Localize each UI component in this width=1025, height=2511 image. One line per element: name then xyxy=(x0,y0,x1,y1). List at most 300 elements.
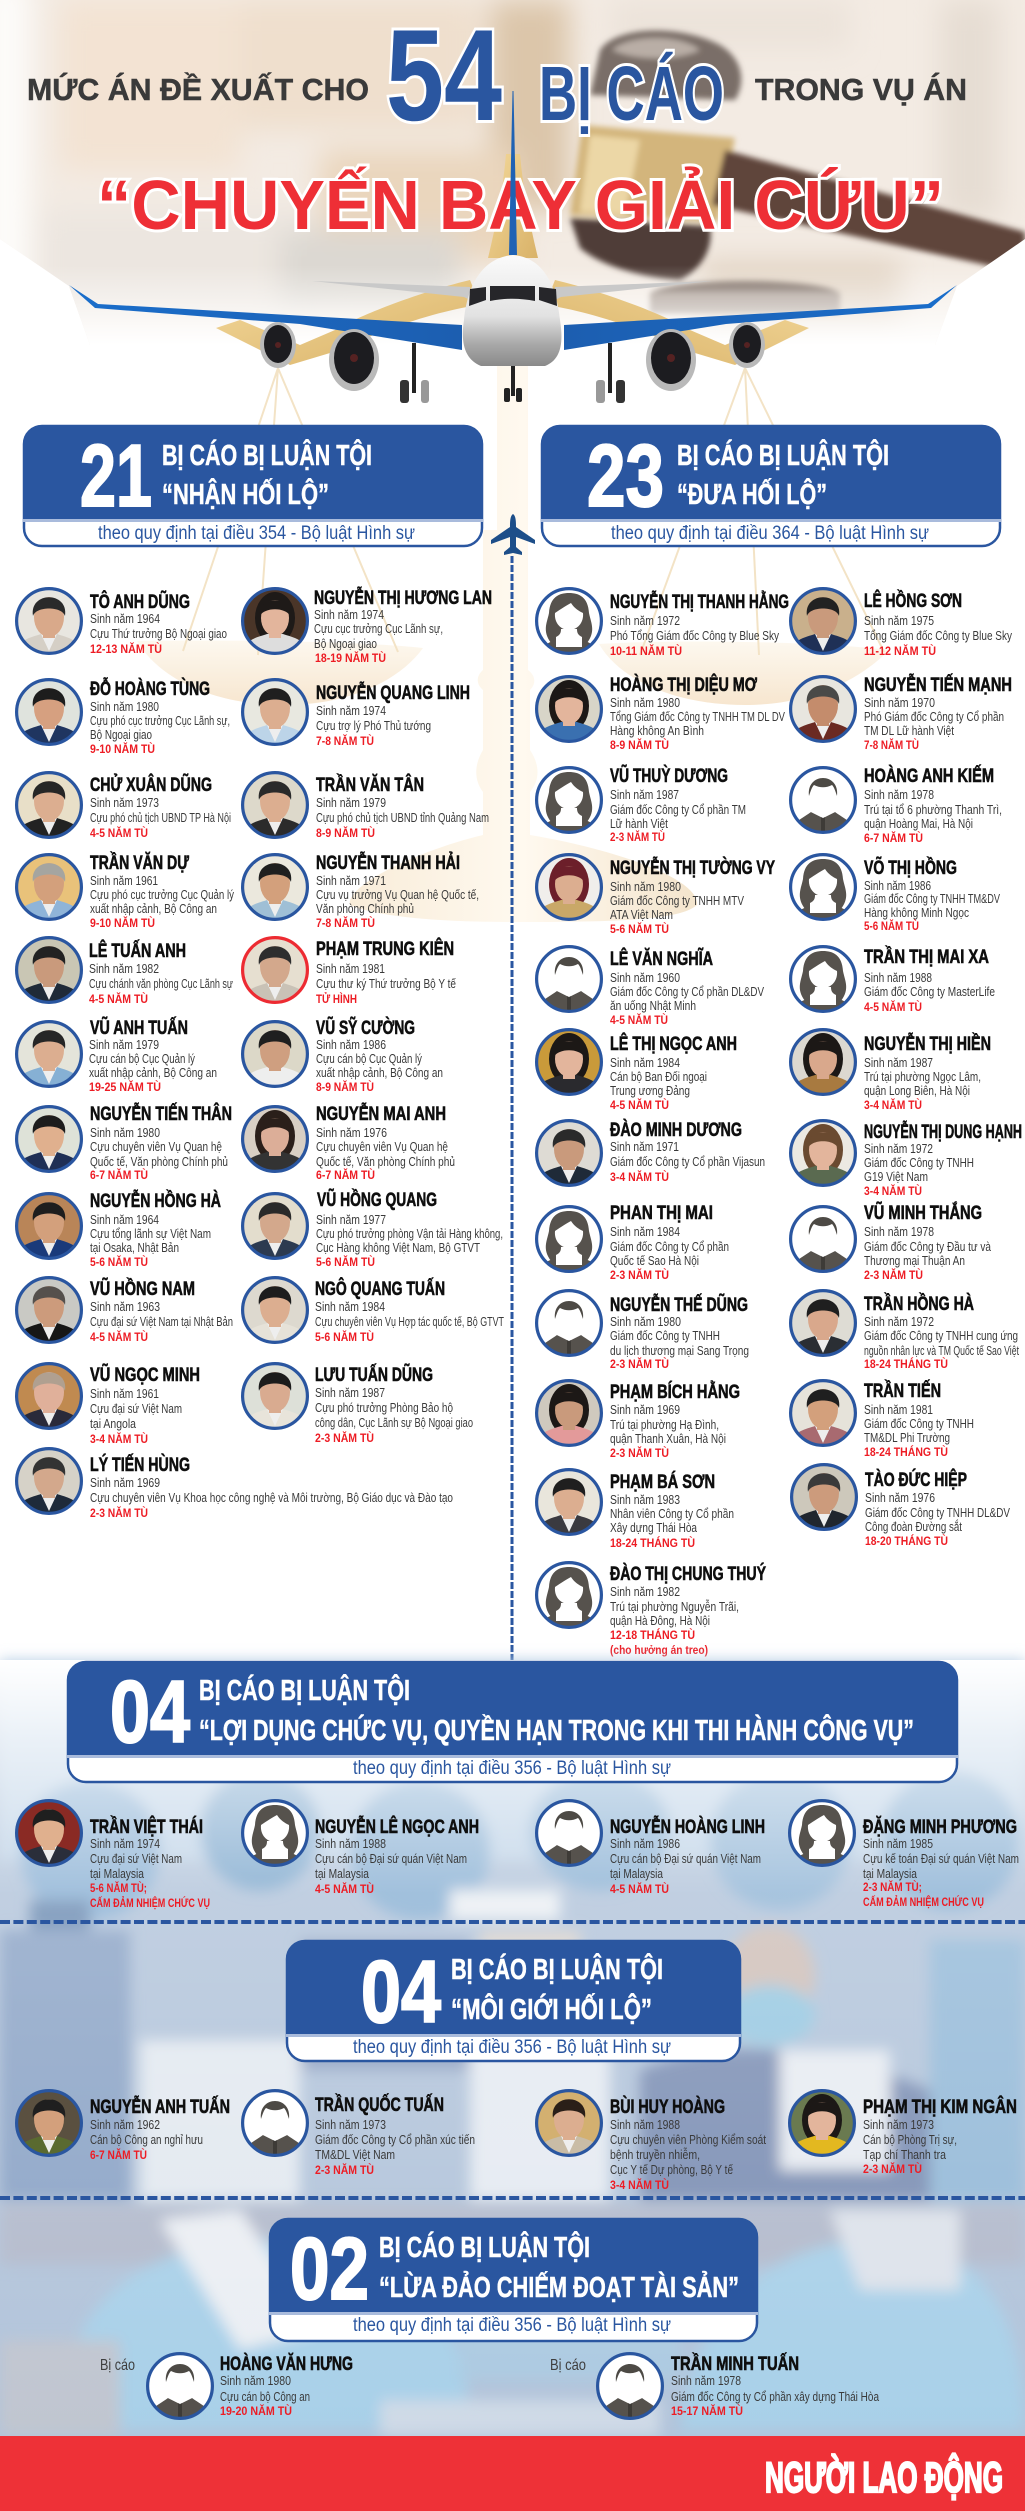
bio: xuất nhập cảnh, Bộ Công an xyxy=(90,902,217,916)
bio: Giám đốc Công ty Đầu tư và xyxy=(864,1240,991,1254)
sentence: 12-13 NĂM TÙ xyxy=(90,641,162,656)
bio xyxy=(864,614,1013,643)
person: Tào Đức Hiệp xyxy=(790,1464,1011,1548)
person: Nguyễn Mai Anh xyxy=(241,1103,455,1182)
sentence: 4-5 NĂM TÙ xyxy=(864,999,922,1014)
scale finial xyxy=(488,154,538,258)
portrait xyxy=(535,589,603,657)
bio: Sinh năm 1974 xyxy=(314,608,384,622)
portrait xyxy=(789,1120,857,1187)
person: Lê Tuấn Anh xyxy=(15,937,233,1006)
bio: Sinh năm 1979 xyxy=(316,796,386,810)
bio: Sinh năm 1980 xyxy=(610,880,681,894)
name: TRẦN VĂN TÂN xyxy=(316,774,424,796)
scale column xyxy=(350,366,697,922)
sentence: 11-12 NĂM TÙ xyxy=(864,643,936,658)
bio: Sinh năm 1979 xyxy=(89,1038,159,1052)
bio xyxy=(90,796,231,825)
bio xyxy=(316,1038,443,1080)
portrait xyxy=(789,947,857,1015)
airplane illustration xyxy=(69,91,957,403)
sentence: 5-6 NĂM TÙ xyxy=(864,918,919,933)
bio: Cục Hàng không Việt Nam, Bộ GTVT xyxy=(316,1241,480,1255)
bio: Sinh năm 1987 xyxy=(315,1386,385,1400)
portrait xyxy=(788,2090,856,2157)
name: NGUYỄN TIẾN THÂN xyxy=(90,1103,232,1125)
bio: Cựu cán bộ Cục Quản lý xyxy=(316,1052,423,1066)
bio: Xây dựng Thái Hòa xyxy=(610,1521,697,1535)
person: Nguyễn Thị Thanh Hằng xyxy=(535,589,789,658)
name: TRẦN VIỆT THÁI xyxy=(90,1816,203,1838)
left pan xyxy=(137,641,423,705)
right wing xyxy=(564,285,957,350)
panel: 02 defendants fraud xyxy=(269,2219,758,2341)
bottom background photo: medical staff in blue gowns xyxy=(0,1660,1025,2436)
person: Nguyễn Thế Dũng xyxy=(529,1291,749,1371)
bio xyxy=(610,614,780,643)
portrait xyxy=(535,1563,603,1631)
engines xyxy=(260,322,765,391)
sentence: 7-8 NĂM TÙ xyxy=(316,915,375,930)
bio: Sinh năm 1987 xyxy=(864,1056,933,1070)
portrait xyxy=(241,679,309,746)
sentence: 3-4 NĂM TÙ xyxy=(610,1169,669,1184)
name: TRẦN TIẾN xyxy=(864,1380,941,1402)
portrait xyxy=(783,1207,863,1275)
person: Lưu Tuấn Dũng xyxy=(241,1363,473,1445)
portrait xyxy=(789,1380,857,1447)
portrait xyxy=(529,947,609,1015)
person: Vũ Minh Thắng xyxy=(783,1202,991,1282)
person: Trần Văn Dự xyxy=(15,852,235,930)
bio: Cựu đại sứ Việt Nam xyxy=(90,1852,182,1866)
bio: Giám đốc Công ty Cổ phần Vijasun xyxy=(610,1155,765,1169)
sentence: 4-5 NĂM TÙ xyxy=(89,991,148,1006)
person: Trần Quốc Tuấn xyxy=(235,2091,475,2177)
person: Đỗ Hoàng Tùng xyxy=(15,678,230,756)
legal basis: theo quy định tại điều 364 - Bộ luật Hình sự xyxy=(611,523,929,544)
bio xyxy=(90,1213,211,1255)
bio: Cựu cán bộ Đại sứ quán Việt Nam xyxy=(315,1852,467,1866)
portrait xyxy=(535,1380,603,1447)
bio: Sinh năm 1978 xyxy=(671,2374,741,2388)
sentence: 3-4 NĂM TÙ xyxy=(864,1183,922,1198)
person: Nguyễn Quang Linh xyxy=(241,679,470,748)
name: NGUYỄN MAI ANH xyxy=(316,1103,446,1125)
bio: Giám đốc Công ty MasterLife xyxy=(864,985,995,999)
name: VŨ HỒNG NAM xyxy=(90,1278,195,1300)
bio xyxy=(89,962,233,991)
person: Nguyễn Thanh Hải xyxy=(241,852,479,930)
number 54: 54 xyxy=(386,2,502,148)
bio: Sinh năm 1986 xyxy=(610,1837,680,1851)
sentence: (cho hưởng án treo) xyxy=(610,1643,708,1657)
person: Đào Minh Dương xyxy=(535,1119,765,1187)
sentence: 2-3 NĂM TÙ xyxy=(610,1445,669,1460)
stabilizers xyxy=(312,281,470,300)
person: Trần Minh Tuấn xyxy=(550,2353,879,2422)
sentence: 6-7 NĂM TÙ xyxy=(316,1167,375,1182)
title line 2: “CHUYẾN BAY GIẢI CỨU” xyxy=(97,166,944,244)
bio: tại Malaysia xyxy=(610,1867,663,1881)
person: Lý Tiến Hùng xyxy=(15,1448,453,1520)
tail fin xyxy=(509,91,517,255)
bio: Cựu chuyên viên Vụ Hợp tác quốc tế, Bộ GTVT xyxy=(315,1315,504,1329)
sentence: 3-4 NĂM TÙ xyxy=(610,2177,669,2192)
sentence: CẤM ĐẢM NHIỆM CHỨC VỤ xyxy=(90,1895,210,1910)
sentence: 2-3 NĂM TÙ xyxy=(864,1267,923,1282)
bio: Công đoàn Đường sắt xyxy=(865,1519,962,1534)
bio: Sinh năm 1971 xyxy=(316,874,386,888)
name: TRẦN QUỐC TUẤN xyxy=(315,2094,444,2116)
person: Hoàng Anh Kiếm xyxy=(783,765,1002,845)
person: Phạm Thị Kim Ngân xyxy=(788,2090,1017,2176)
bio: Sinh năm 1978 xyxy=(864,1225,934,1239)
portrait xyxy=(241,588,309,655)
bio xyxy=(865,1491,1011,1534)
bio: Cựu chuyên viên Vụ Quan hệ xyxy=(90,1140,222,1154)
icon: small plane xyxy=(491,514,535,555)
portrait xyxy=(140,2354,220,2422)
portrait xyxy=(15,937,83,1004)
portrait xyxy=(15,1363,83,1430)
sentence: 2-3 NĂM TÙ xyxy=(610,829,665,844)
person: Nguyễn Thị Hiền xyxy=(789,1029,991,1112)
bio: Sinh năm 1971 xyxy=(610,1140,679,1154)
name: NGUYỄN QUANG LINH xyxy=(316,682,470,704)
footer band xyxy=(0,2436,1025,2511)
bio: Sinh năm 1973 xyxy=(863,2118,934,2132)
sentence: 5-6 NĂM TÙ xyxy=(90,1254,148,1269)
bio xyxy=(610,696,785,738)
name: ĐỖ HOÀNG TÙNG xyxy=(90,678,210,700)
name: PHẠM BÍCH HẰNG xyxy=(610,1381,740,1403)
bio: Sinh năm 1981 xyxy=(316,962,385,976)
sentence: 4-5 NĂM TÙ xyxy=(90,1329,148,1344)
legal basis: theo quy định tại điều 356 - Bộ luật Hình sự xyxy=(353,1758,671,1779)
sentence: 19-20 NĂM TÙ xyxy=(220,2403,292,2418)
bio: Cựu cục trưởng Cục Lãnh sự, xyxy=(314,622,443,636)
portrait xyxy=(15,1448,83,1515)
scale ropes xyxy=(183,368,884,655)
name: VŨ SỸ CƯỜNG xyxy=(316,1017,415,1039)
sentence: 2-3 NĂM TÙ xyxy=(90,1505,148,1520)
bio: Sinh năm 1986 xyxy=(316,1038,386,1052)
bio xyxy=(315,1837,467,1881)
bio: Cựu cán bộ Đại sứ quán Việt Nam xyxy=(610,1852,761,1866)
sentence: 15-17 NĂM TÙ xyxy=(671,2403,743,2418)
title line 1 left: MỨC ÁN ĐỀ XUẤT CHO xyxy=(27,71,369,107)
bio: Sinh năm 1984 xyxy=(610,1056,680,1070)
bio: G19 Việt Nam xyxy=(864,1170,928,1184)
legal basis: theo quy định tại điều 354 - Bộ luật Hình sự xyxy=(98,523,415,544)
bio xyxy=(610,880,745,922)
centre dashed divider xyxy=(510,556,514,1660)
bio xyxy=(316,1126,455,1169)
bio: Cựu phó cục trưởng Cục Lãnh sự, xyxy=(90,714,230,728)
bio: Sinh năm 1976 xyxy=(865,1491,935,1505)
bio: Giám đốc Công ty TNHH MTV xyxy=(610,894,745,908)
portrait xyxy=(235,2091,315,2159)
bio: Cựu cán bộ Cục Quản lý xyxy=(89,1052,196,1066)
person: Nguyễn Hồng Hà xyxy=(15,1190,221,1269)
bio: Cựu phó chủ tịch UBND TP Hà Nội xyxy=(90,811,231,825)
bio xyxy=(90,1837,182,1881)
person: Nguyễn Anh Tuấn xyxy=(15,2090,230,2162)
person: Phạm Trung Kiên xyxy=(241,937,456,1006)
bio: Giám đốc Công ty Cổ phần xúc tiến xyxy=(315,2133,475,2147)
name: VŨ NGỌC MINH xyxy=(90,1364,200,1386)
name: NGUYỄN HỒNG HÀ xyxy=(90,1190,221,1212)
person: Đặng Minh Phương xyxy=(788,1801,1019,1909)
person: Nguyễn Thị Hương Lan xyxy=(241,587,492,665)
bio: Sinh năm 1961 xyxy=(90,1387,159,1401)
bio: Cựu chánh văn phòng Cục Lãnh sự xyxy=(89,977,233,991)
name: BÙI HUY HOÀNG xyxy=(610,2096,725,2118)
person: Trần Việt Thái xyxy=(15,1800,210,1910)
name: LÊ THỊ NGỌC ANH xyxy=(610,1033,737,1055)
person: Phạm Bích Hằng xyxy=(535,1380,740,1460)
bio: Sinh năm 1973 xyxy=(315,2118,386,2132)
name: NGUYỄN THỊ TƯỜNG VY xyxy=(610,857,775,879)
sentence: 8-9 NĂM TÙ xyxy=(610,737,669,752)
bio xyxy=(90,1300,233,1329)
bio: Trú tại phường Nguyễn Trãi, xyxy=(610,1599,739,1614)
bio xyxy=(316,874,479,916)
bio: Cán bộ Phòng Trị sự, xyxy=(863,2133,957,2147)
bio: Sinh năm 1974 xyxy=(316,704,386,718)
portrait xyxy=(15,1021,83,1088)
bio: Bộ Ngoại giao xyxy=(90,728,152,742)
person: Chử Xuân Dũng xyxy=(15,772,231,840)
bio: quận Hà Đông, Hà Nội xyxy=(610,1614,710,1628)
name: ĐÀO MINH DƯƠNG xyxy=(610,1119,742,1141)
name: VŨ HỒNG QUANG xyxy=(317,1189,437,1211)
bio: xuất nhập cảnh, Bộ Công an xyxy=(316,1066,443,1080)
person: Vũ Ngọc Minh xyxy=(15,1363,200,1446)
sentence: 8-9 NĂM TÙ xyxy=(316,825,375,840)
bio: TM&DL Việt Nam xyxy=(315,2148,395,2162)
person: Võ Thị Hồng xyxy=(789,855,1000,933)
bio: Sinh năm 1960 xyxy=(610,971,680,985)
bio xyxy=(864,879,1000,920)
bio: bệnh truyền nhiễm, xyxy=(610,2147,700,2162)
scale beam gold xyxy=(216,280,480,365)
portrait xyxy=(241,1363,309,1430)
bio: Sinh năm 1969 xyxy=(90,1476,160,1490)
person: Vũ Thuỳ Dương xyxy=(535,765,746,844)
charge: “ĐƯA HỐI LỘ” xyxy=(677,477,827,511)
portrait xyxy=(529,1801,609,1869)
bio: Cựu chuyên viên Vụ Khoa học công nghệ và Môi trường, Bộ Giáo dục và Đào tạo xyxy=(90,1491,453,1505)
bio: Cựu trợ lý Phó Thủ tướng xyxy=(316,719,431,733)
title xyxy=(27,2,967,244)
bio xyxy=(610,1056,707,1098)
bio: Sinh năm 1984 xyxy=(315,1300,385,1314)
name: NGUYỄN THỊ HƯƠNG LAN xyxy=(314,587,492,609)
bio xyxy=(610,1140,765,1169)
number: 02 xyxy=(290,2219,369,2318)
name: PHAN THỊ MAI xyxy=(610,1203,713,1224)
bio: Thương mại Thuận An xyxy=(864,1254,965,1268)
bio xyxy=(864,1315,1019,1358)
bio xyxy=(90,1126,228,1169)
name: VÕ THỊ HỒNG xyxy=(864,857,957,879)
bio: ATA Việt Nam xyxy=(610,908,673,922)
sentence: 3-4 NĂM TÙ xyxy=(864,1097,922,1112)
sentence: 6-7 NĂM TÙ xyxy=(864,830,923,845)
portrait xyxy=(15,1277,83,1344)
header photo: gavel xyxy=(0,0,1025,350)
name: PHẠM TRUNG KIÊN xyxy=(316,938,454,960)
name: TÔ ANH DŨNG xyxy=(90,591,190,613)
portrait xyxy=(241,1801,309,1869)
bio: Tạp chí Thanh tra xyxy=(863,2148,946,2162)
heading: BỊ CÁO BỊ LUẬN TỘI xyxy=(199,1673,410,1707)
name: LÊ TUẤN ANH xyxy=(89,940,186,962)
name: PHẠM BÁ SƠN xyxy=(610,1471,715,1493)
portrait xyxy=(789,1029,857,1096)
bio xyxy=(863,2118,957,2162)
number: 21 xyxy=(80,426,152,525)
bio: Tổng Giám đốc Công ty TNHH TM DL DV xyxy=(610,710,785,724)
portrait xyxy=(535,1469,603,1536)
number: 23 xyxy=(587,426,664,525)
bio: Phó Tổng Giám đốc Công ty Blue Sky xyxy=(610,629,780,643)
sentence: 10-11 NĂM TÙ xyxy=(610,643,682,658)
name: NGUYỄN THANH HẢI xyxy=(316,852,460,874)
sentence: 4-5 NĂM TÙ xyxy=(610,1097,669,1112)
bio: Sinh năm 1980 xyxy=(610,1315,681,1329)
bio xyxy=(90,1387,182,1431)
person: Tô Anh Dũng xyxy=(15,588,227,656)
portrait xyxy=(241,854,309,921)
charge: “LỪA ĐẢO CHIẾM ĐOẠT TÀI SẢN” xyxy=(379,2270,739,2304)
sentence: 5-6 NĂM TÙ xyxy=(610,921,669,936)
portrait xyxy=(535,768,603,836)
bio xyxy=(315,2118,475,2162)
sentence: 2-3 NĂM TÙ xyxy=(610,1267,669,1282)
bio: Sinh năm 1970 xyxy=(864,696,935,710)
portrait xyxy=(241,1106,309,1173)
name: VŨ MINH THẮNG xyxy=(864,1202,982,1224)
person: Trần Thị Mai Xa xyxy=(789,946,995,1015)
legal basis: theo quy định tại điều 356 - Bộ luật Hình sự xyxy=(353,2037,671,2058)
name: VŨ ANH TUẤN xyxy=(90,1017,188,1039)
person: Ngô Quang Tuấn xyxy=(241,1277,504,1344)
right pan xyxy=(599,642,889,705)
bio: Sinh năm 1974 xyxy=(90,1837,160,1851)
bio xyxy=(90,612,227,641)
person: Nguyễn Thị Tường Vy xyxy=(535,854,775,936)
bio: Sinh năm 1964 xyxy=(90,1213,159,1227)
portrait xyxy=(15,1800,83,1867)
name: TRẦN HỒNG HÀ xyxy=(864,1293,974,1315)
sentence: 5-6 NĂM TÙ xyxy=(316,1254,375,1269)
portrait xyxy=(788,1801,856,1869)
bio xyxy=(864,788,1002,831)
portrait xyxy=(529,1291,609,1359)
portrait xyxy=(241,937,309,1004)
bio: tại Malaysia xyxy=(863,1867,917,1881)
sentence: 2-3 NĂM TÙ xyxy=(863,2161,922,2176)
bio: Sinh năm 1987 xyxy=(610,788,679,802)
label: Bị cáo xyxy=(100,2357,135,2374)
bio: Trung ương Đảng xyxy=(610,1084,690,1098)
bio xyxy=(90,2118,203,2147)
bio: du lịch thương mại Sang Trọng xyxy=(610,1344,749,1358)
person: Vũ Sỹ Cường xyxy=(241,1017,443,1094)
bio: Quốc tế Sao Hà Nội xyxy=(610,1254,699,1268)
bio: ăn uống Nhật Minh xyxy=(610,999,696,1013)
bio: Hàng không Minh Ngọc xyxy=(864,906,969,920)
portrait xyxy=(535,1120,603,1187)
bio: Giám đốc Công ty Cổ phần DL&DV xyxy=(610,985,765,999)
sentence xyxy=(90,1880,210,1910)
portrait xyxy=(535,1029,603,1096)
portrait xyxy=(783,768,863,836)
bio: Giám đốc Công ty Cổ phần TM xyxy=(610,803,746,817)
bio: tại Angola xyxy=(90,1417,136,1431)
bio xyxy=(610,788,746,831)
sentence: 19-25 NĂM TÙ xyxy=(89,1079,161,1094)
bio: Sinh năm 1972 xyxy=(610,614,680,628)
person: Nguyễn Hoàng Linh xyxy=(529,1801,765,1896)
bio xyxy=(314,608,443,651)
name: LÊ HỒNG SƠN xyxy=(864,590,962,612)
bio: tại Osaka, Nhật Bản xyxy=(90,1241,179,1255)
bio: Cựu đại sứ Việt Nam xyxy=(90,1402,182,1416)
bio: Sinh năm 1985 xyxy=(863,1837,933,1851)
bio: Sinh năm 1975 xyxy=(864,614,934,628)
portrait xyxy=(15,1193,83,1260)
person: Vũ Anh Tuấn xyxy=(15,1017,217,1094)
bio: Hàng không An Bình xyxy=(610,724,704,738)
person: Nguyễn Tiến Thân xyxy=(15,1103,232,1182)
bio: công dân, Cục Lãnh sự Bộ Ngoại giao xyxy=(315,1416,473,1430)
bio xyxy=(316,796,489,825)
portrait xyxy=(789,588,857,655)
heading: BỊ CÁO BỊ LUẬN TỘI xyxy=(451,1952,663,1986)
name: LÊ VĂN NGHĨA xyxy=(610,948,713,970)
person: Trần Văn Tân xyxy=(241,772,489,840)
name: NGUYỄN ANH TUẤN xyxy=(90,2096,230,2118)
bio xyxy=(220,2374,310,2404)
cockpit windows xyxy=(469,287,486,306)
bio: Sinh năm 1988 xyxy=(610,2118,680,2132)
scale of justice background xyxy=(137,154,889,922)
person: Bùi Huy Hoàng xyxy=(535,2090,766,2192)
bio xyxy=(610,1315,749,1358)
bio: Sinh năm 1988 xyxy=(315,1837,386,1851)
bio: quận Long Biên, Hà Nội xyxy=(864,1084,970,1098)
portrait xyxy=(535,676,603,743)
bio xyxy=(610,1225,729,1268)
bio: Lữ hành Việt xyxy=(610,817,668,831)
person: Vũ Hồng Nam xyxy=(15,1277,233,1344)
legal basis: theo quy định tại điều 356 - Bộ luật Hình sự xyxy=(353,2315,671,2336)
bio: Cựu phó cục trưởng Cục Quản lý xyxy=(90,888,235,902)
bio xyxy=(90,1476,453,1505)
bio: Cựu chuyên viên Phòng Kiểm soát xyxy=(610,2133,766,2147)
bio: Sinh năm 1964 xyxy=(90,612,160,626)
bio: Sinh năm 1986 xyxy=(864,879,931,893)
person: Trần Tiến xyxy=(789,1380,974,1459)
name: NGUYỄN THẾ DŨNG xyxy=(610,1294,748,1316)
sentence: 2-3 NĂM TÙ; xyxy=(863,1879,922,1894)
bio: Cựu vụ trưởng Vụ Quan hệ Quốc tế, xyxy=(316,888,479,902)
name: ĐÀO THỊ CHUNG THUÝ xyxy=(610,1563,766,1585)
